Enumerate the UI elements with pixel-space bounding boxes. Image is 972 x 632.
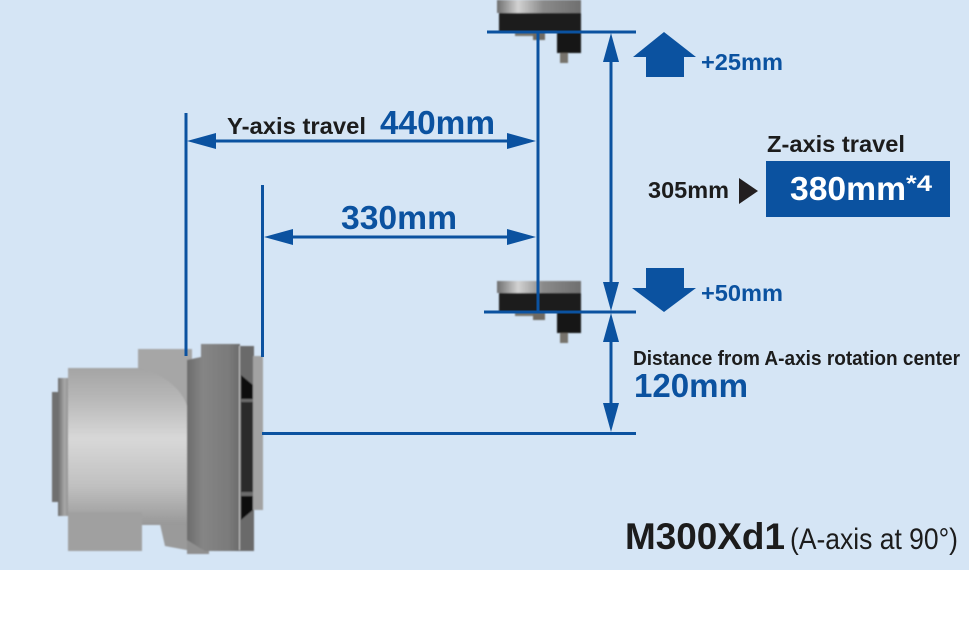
label: 305mm: 305mm — [648, 177, 729, 203]
icon: lower tool — [497, 281, 581, 343]
value: 120mm: 120mm — [634, 367, 748, 404]
dimension lines — [184, 30, 636, 435]
caption: model name: M300Xd1 — [625, 516, 785, 557]
callout: 380mm box — [766, 161, 950, 217]
icon: upper tool — [497, 0, 581, 63]
value: 440mm: 440mm — [380, 104, 495, 141]
callout: 380mm box: *4 — [906, 171, 933, 196]
icon: big up arrow — [633, 32, 696, 77]
arrow: 330mm — [264, 229, 536, 245]
label: +50mm: +50mm — [701, 280, 783, 306]
arrow: Y-axis travel 440mm — [187, 133, 536, 149]
value: 330mm: 330mm — [341, 199, 457, 236]
icon: spindle head side view — [52, 344, 263, 554]
callout: 380mm box: 380mm — [790, 170, 906, 207]
arrow: Z-axis travel — [603, 33, 619, 311]
icon: right triangle — [739, 178, 758, 204]
arrow: distance from A-axis center — [603, 313, 619, 432]
label: Z-axis travel: Z-axis travel — [767, 131, 905, 157]
label: +25mm: +25mm — [701, 49, 783, 75]
label: Y-axis travel: Y-axis travel — [227, 113, 366, 139]
icon: big down arrow — [632, 268, 696, 312]
